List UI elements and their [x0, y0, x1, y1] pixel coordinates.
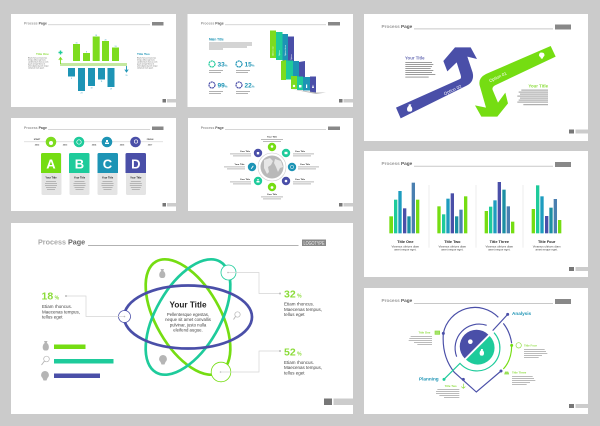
stat 32%: Etiam rhoncus.: [284, 302, 314, 306]
cluster two bars: [437, 193, 467, 233]
bar value labels: 55: [126, 75, 128, 77]
timeline labels: 2017: [148, 144, 153, 146]
callout dots: [65, 272, 281, 373]
title one text: Etiam rhoncus maecenas: [28, 56, 47, 60]
slide footer: [162, 99, 176, 102]
slide header: [382, 24, 571, 30]
stat 52%: Maecenas tempus,: [284, 365, 322, 370]
main title text: Main Title: [209, 38, 224, 42]
stat 52%: 52 %: [284, 346, 302, 358]
radial labels: Your Title: [295, 150, 306, 153]
card A: A: [46, 156, 56, 172]
card C: C: [103, 156, 113, 172]
slide footer: [339, 203, 353, 206]
cluster titles and captions: Title One: [397, 240, 413, 244]
card C: [98, 153, 118, 195]
central band: [60, 63, 127, 66]
donut stats: 15%: [244, 62, 255, 68]
step icons: [46, 137, 141, 147]
title one text: sed ipsum nam quam: [28, 68, 45, 70]
slide footer: [162, 203, 176, 206]
radial icons: [248, 143, 296, 191]
timeline labels: [34, 138, 154, 146]
panel: four bar clusters slide: [364, 151, 588, 277]
panel: ABCD timeline slide: [11, 118, 176, 211]
title two text: amet adipiscing sem neque: [137, 64, 158, 68]
slide header: [24, 126, 164, 130]
title labels: Title Three: [512, 371, 527, 375]
timeline labels: FINISH: [147, 139, 154, 141]
bar value labels: 24: [95, 35, 97, 37]
slide header: LOGOTYPE: [304, 241, 325, 247]
bar value labels: 11: [101, 81, 102, 83]
slide header: [38, 238, 326, 247]
slide header: [201, 22, 340, 26]
bar value labels: 13: [114, 46, 116, 48]
main title text: [209, 38, 252, 50]
icon: money bag: [407, 104, 412, 112]
bar value labels: [71, 35, 128, 94]
arrows and plus: [58, 50, 128, 72]
bar value labels: 8: [71, 78, 72, 80]
your title left text: [405, 56, 435, 77]
stat 52%: Etiam rhoncus.: [284, 360, 314, 365]
donut stats: 99%: [218, 82, 228, 90]
timeline line: [24, 140, 163, 143]
central split circle: [460, 330, 495, 365]
title one text: Title One: [36, 52, 49, 56]
donut captions: [209, 70, 250, 94]
stat 32%: [284, 288, 322, 317]
card D: Your Title: [130, 176, 142, 180]
donut stats: [209, 61, 255, 90]
title two text: Etiam rhoncus maecenas: [137, 56, 156, 60]
teal ring and line: [444, 333, 500, 379]
center title text: Pellentesque egestas,: [167, 312, 209, 317]
option labels: [443, 71, 508, 96]
navy bent arrow: [396, 47, 477, 118]
cluster titles and captions: Vivamus ultrices diam: [485, 244, 514, 248]
stat 52%: [284, 346, 322, 375]
title labels: Title Two: [445, 384, 457, 388]
card A: Your Title: [45, 176, 57, 180]
bar value labels: 18: [90, 88, 92, 90]
slide header: Process Page: [24, 22, 47, 26]
cluster one bars: [389, 183, 419, 233]
staircase icons: [293, 84, 314, 88]
cluster titles and captions: Vivamus ultrices diam: [438, 244, 467, 248]
center title text: eleifend augue.: [173, 328, 203, 333]
title one text: condimentum rhoncus sem: [28, 60, 49, 64]
slide footer: [324, 398, 353, 405]
donut stats: 33%: [218, 62, 228, 68]
upward bars: [73, 36, 119, 61]
staircase labels: Option: [290, 54, 293, 60]
radial labels: Your Title: [267, 136, 278, 138]
cluster titles and captions: [391, 240, 561, 252]
panel: pin diagram slide: [364, 288, 588, 414]
stat 18%: 18 %: [42, 290, 60, 302]
title one text: quam semper libero sit: [28, 62, 46, 66]
staircase labels: Option one: [272, 45, 274, 56]
panel: atom main slide: [11, 223, 353, 414]
pin outline: [443, 307, 512, 392]
slide header: Process Page: [382, 24, 413, 29]
timeline labels: 2013: [63, 144, 68, 146]
title two text: quam semper libero sit: [137, 62, 155, 66]
slide footer: [569, 404, 588, 408]
slide header: Process Page: [201, 126, 224, 130]
slide footer: [339, 99, 353, 102]
cluster titles and captions: Title Three: [490, 240, 509, 244]
bar value labels: 15: [76, 42, 78, 44]
title two text: [137, 52, 158, 70]
option labels: Option 02: [443, 84, 463, 96]
card B: B: [75, 156, 84, 172]
stat 32%: Maecenas tempus,: [284, 307, 322, 312]
cluster titles and captions: Title Four: [538, 240, 556, 244]
title labels: Title Four: [524, 344, 538, 348]
card D: D: [131, 156, 140, 172]
ellipse nodes: [118, 265, 236, 382]
radial label captions: [224, 139, 319, 199]
your title left text: Your Title: [405, 56, 425, 61]
donut stats: 22%: [244, 82, 255, 90]
panel: bar chart up and down slide: [11, 14, 176, 107]
cluster titles and captions: Vivamus ultrices diam: [533, 244, 561, 248]
cluster titles and captions: Title Two: [444, 240, 461, 244]
radial labels: Your Title: [235, 163, 245, 166]
lime bent arrow: [475, 46, 556, 117]
analysis and planning labels: Analysis: [512, 311, 532, 316]
card D: [126, 153, 146, 195]
card B: Your Title: [74, 176, 86, 180]
analysis and planning labels: Planning: [419, 377, 439, 382]
slide header: [382, 161, 571, 167]
stat 52%: tellus eget: [284, 370, 305, 375]
stat 32%: tellus eget: [284, 312, 305, 317]
slide footer: [569, 130, 588, 134]
title two text: Title Two: [137, 52, 150, 56]
stat 18%: Etiam rhoncus.: [42, 304, 72, 309]
atom ellipses: [124, 246, 252, 388]
slide header: Process Page: [38, 238, 85, 246]
stat 32%: 32 %: [284, 288, 302, 300]
panel: staircase and donuts slide: [188, 14, 353, 107]
cluster titles and captions: Vivamus ultrices diam: [391, 244, 420, 248]
slide header: Process Page: [24, 126, 47, 130]
title one text: tempus tellus eget nunc: [28, 58, 46, 62]
panel: two arrows slide: [364, 14, 588, 141]
panel: globe radial slide: [188, 118, 353, 211]
staircase blocks: [270, 30, 326, 94]
slide header: [201, 126, 340, 130]
center title text: neque sit amet convallis: [165, 317, 211, 322]
title two text: tempus tellus eget nunc: [137, 58, 155, 62]
staircase labels: [272, 44, 293, 60]
title captions: [409, 336, 547, 398]
bar value labels: 20: [104, 40, 106, 42]
icon: bulb: [539, 53, 544, 59]
slide header: [24, 22, 164, 26]
your title right text: [517, 83, 549, 105]
legend bars: [54, 344, 114, 378]
timeline labels: 2015: [120, 144, 125, 146]
card A: [41, 153, 62, 195]
staircase labels: Option three: [284, 44, 287, 56]
radial labels: [235, 136, 311, 196]
title one text: [28, 52, 49, 70]
radial labels: Your Title: [295, 178, 306, 181]
legend icons: [41, 341, 49, 380]
callout connector lines: [66, 272, 280, 372]
timeline labels: 2012: [35, 144, 40, 146]
cluster titles and captions: amet neque eget.: [394, 248, 417, 252]
center title text: pulvinar, justo nulla: [170, 322, 207, 327]
cluster titles and captions: amet neque eget.: [488, 248, 511, 252]
option labels: Option 01: [488, 71, 508, 83]
cluster four bars: [532, 185, 561, 233]
bar value labels: 19: [110, 88, 112, 90]
slide header: [382, 298, 571, 304]
title labels: Title One: [418, 331, 431, 335]
connector dots: [442, 313, 513, 381]
analysis and planning labels: [419, 311, 532, 382]
stat 18%: [42, 290, 80, 320]
bar value labels: 23: [80, 92, 82, 94]
slide header: Process Page: [382, 298, 413, 303]
card C: Your Title: [102, 176, 114, 180]
radial labels: Your Title: [240, 150, 251, 153]
radial labels: Your Title: [240, 178, 251, 181]
timeline labels: START: [34, 138, 41, 141]
your title right text: Your Title: [528, 83, 549, 88]
center title text: [165, 300, 211, 333]
bar value labels: 8: [86, 52, 87, 54]
lime arc: [503, 346, 512, 369]
staircase labels: Option: [278, 50, 281, 56]
card B: [69, 153, 90, 195]
stat 18%: Maecenas tempus,: [42, 309, 80, 314]
title labels: [418, 331, 538, 388]
globe: [258, 153, 286, 181]
title one text: amet adipiscing sem neque: [28, 64, 49, 68]
cluster titles and captions: amet neque eget.: [441, 248, 464, 252]
slide header: Process Page: [382, 161, 413, 166]
radial labels: Your Title: [267, 193, 278, 196]
title two text: condimentum rhoncus sem: [137, 60, 158, 64]
stat 18%: tellus eget: [42, 314, 63, 320]
center title text: Your Title: [170, 300, 207, 310]
downward bars: [68, 68, 114, 91]
cluster titles and captions: amet neque eget.: [536, 248, 558, 252]
slide header: Process Page: [201, 22, 224, 26]
slide footer: [569, 267, 588, 271]
atom inner icons: [159, 269, 240, 364]
title icons: [435, 331, 521, 388]
timeline labels: 2014: [92, 144, 97, 146]
cluster three bars: [485, 182, 514, 233]
radial labels: Your Title: [300, 163, 311, 166]
title two text: sed ipsum nam quam: [137, 68, 154, 70]
